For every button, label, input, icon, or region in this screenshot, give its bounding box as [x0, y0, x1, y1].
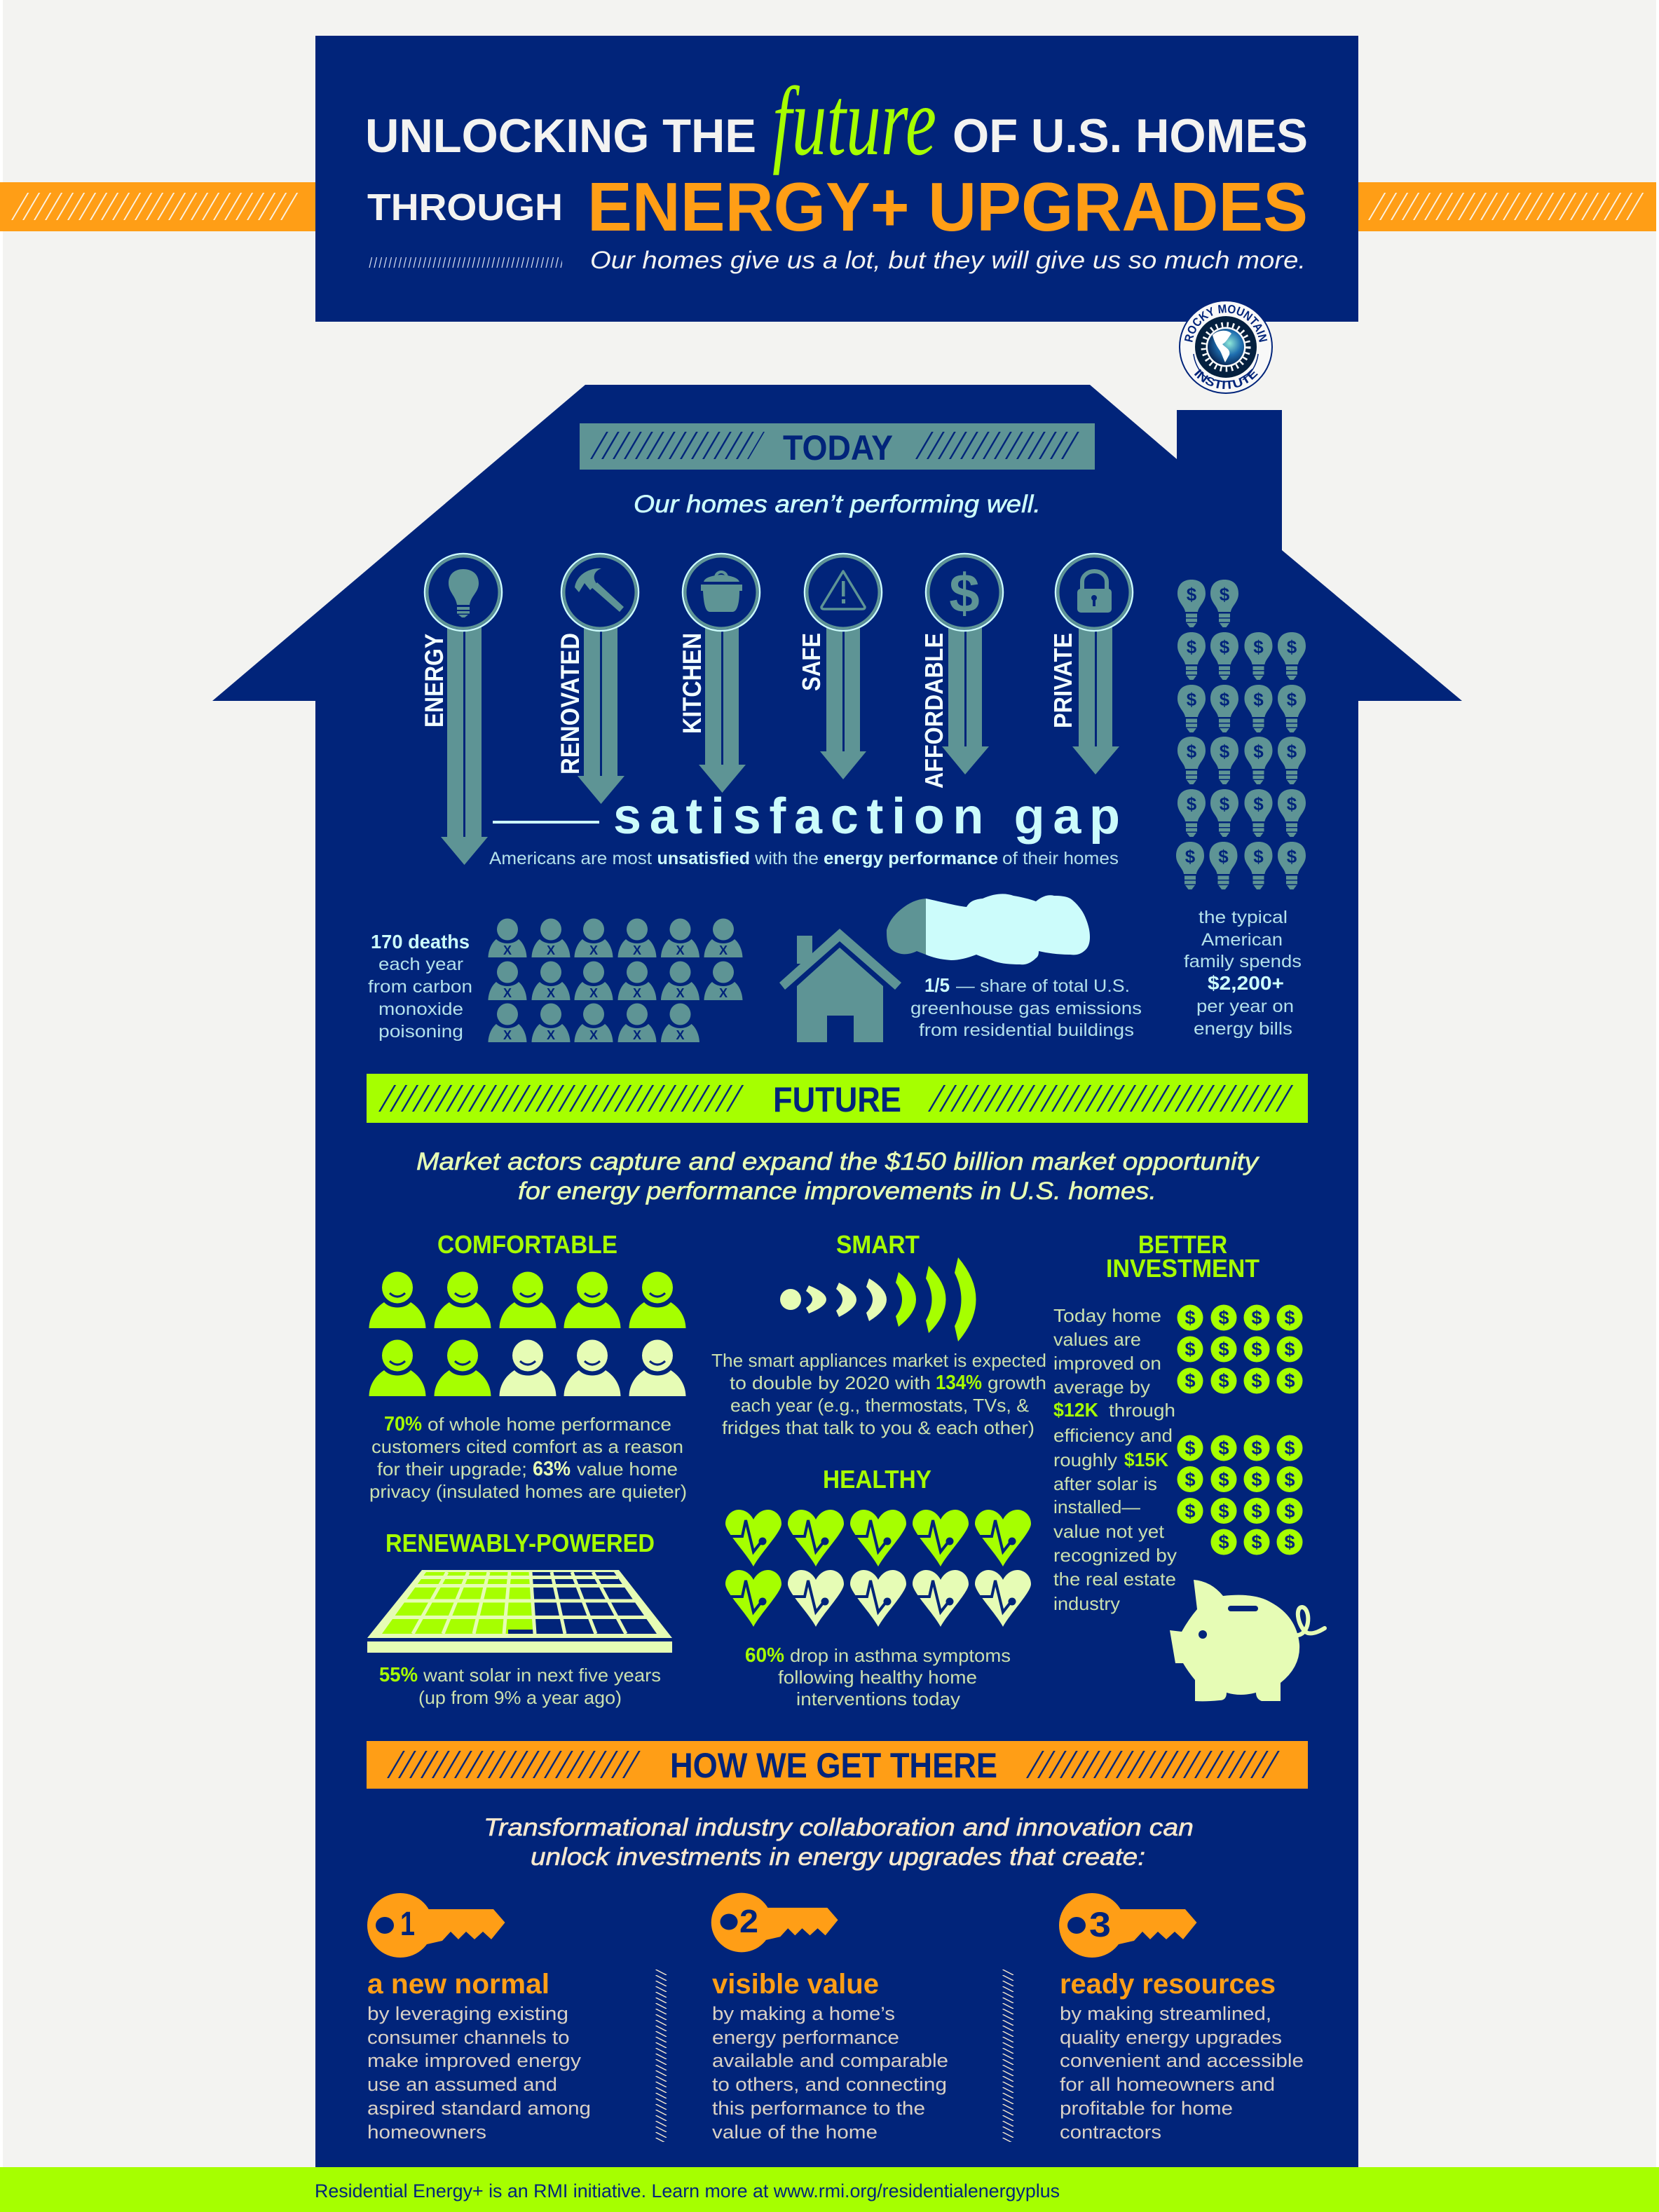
smart text: to double by 2020 with: [730, 1372, 931, 1393]
emissions text: greenhouse gas emissions: [910, 999, 1142, 1018]
section: renewably-powered: [367, 1529, 672, 1708]
text: a new normal: consumer channels to: [367, 2027, 569, 2048]
text: visible value: [712, 2003, 948, 2143]
healthy text: following healthy home: [778, 1667, 977, 1688]
better investment text: Today home: [1053, 1305, 1161, 1326]
text: a new normal: aspired standard among: [367, 2098, 591, 2119]
emissions text: [910, 974, 1142, 1040]
icon: pot: [683, 554, 760, 631]
header tagline: Our homes give us a lot, but they will give us so much more.: [590, 247, 1306, 274]
today banner: [580, 423, 1095, 470]
header tagline: [368, 247, 1306, 274]
satisfaction gap caption: [489, 849, 1119, 868]
family energy bills text: American: [1201, 930, 1283, 950]
text: ready resources: quality energy upgrades: [1060, 2027, 1282, 2048]
better investment text: roughly: [1053, 1449, 1117, 1470]
carbon monoxide deaths text: poisoning: [378, 1022, 463, 1042]
better investment text: improved on: [1053, 1353, 1161, 1374]
icon: house: [779, 929, 901, 1042]
text: a new normal: homeowners: [367, 2122, 486, 2143]
better investment heading: INVESTMENT: [1106, 1254, 1259, 1283]
text: ready resources: by making streamlined,: [1060, 2003, 1271, 2024]
family energy bills text: family spends: [1184, 952, 1302, 971]
icon: dollar: $: [949, 562, 980, 624]
text: a new normal: [367, 2003, 591, 2143]
text: ready resources: [1060, 2003, 1304, 2143]
icon: warning triangle: [805, 554, 882, 631]
arrow: energy: [420, 624, 488, 865]
panel: today: [368, 423, 1306, 1042]
family energy bills text: energy bills: [1194, 1019, 1292, 1039]
better investment text: efficiency and: [1053, 1425, 1173, 1446]
dollar coins chart: $$$$: [1184, 1370, 1295, 1391]
comfortable text: customers cited comfort as a reason: [371, 1436, 683, 1457]
comfortable text: [369, 1413, 687, 1502]
better investment text: industry: [1053, 1593, 1120, 1614]
carbon monoxide deaths text: each year: [378, 955, 463, 974]
better investment text: installed—: [1053, 1496, 1140, 1517]
column: a new normal: [367, 1893, 591, 2143]
comfortable text: privacy (insulated homes are quieter): [369, 1481, 687, 1502]
arrow: private: PRIVATE: [1049, 633, 1077, 728]
carbon monoxide deaths text: monoxide: [378, 999, 463, 1019]
dollar coins chart: $$$$: [1184, 1307, 1295, 1328]
future subheading: for energy performance improvements in U.S. homes.: [518, 1177, 1156, 1205]
title line two: THROUGH: [367, 186, 563, 228]
comfortable text: of whole home performance: [428, 1414, 671, 1435]
dollar bulbs chart: $$$$: [1187, 689, 1297, 710]
icon: key 1: 1: [400, 1906, 415, 1943]
comfortable text: for their upgrade;: [377, 1459, 527, 1480]
icon: dollar: [926, 554, 1003, 631]
better investment text: values are: [1053, 1329, 1141, 1350]
house silhouette: [212, 385, 1462, 2167]
arrow: kitchen: KITCHEN: [678, 633, 706, 734]
how we get there subheading: [484, 1814, 1194, 1871]
icon: key 2: 2: [739, 1903, 758, 1939]
panel: future: [367, 1074, 1325, 1709]
header panel: [315, 36, 1358, 322]
better investment text: $12K: [1053, 1399, 1098, 1421]
better investment text: the real estate: [1053, 1569, 1176, 1590]
better investment text: after solar is: [1053, 1473, 1157, 1494]
smart text: fridges that talk to you & each other): [722, 1417, 1035, 1438]
family energy bills text: the typical: [1199, 908, 1288, 927]
title line one: UNLOCKING THE: [365, 109, 756, 163]
column: ready resources: [1059, 1893, 1304, 2143]
smart text: [711, 1350, 1046, 1438]
satisfaction gap caption: Americans are most: [489, 849, 652, 868]
text: a new normal: use an assumed and: [367, 2074, 557, 2095]
emissions text: 1/5: [924, 974, 950, 996]
how we get there banner: HOW WE GET THERE: [670, 1746, 997, 1785]
how we get there subheading: Transformational industry collaboration and innovation can: [484, 1814, 1194, 1841]
text: visible value: available and comparable: [712, 2050, 948, 2071]
arrow: renovated: [556, 624, 624, 804]
renewably-powered text: [379, 1664, 661, 1708]
future subheading: Market actors capture and expand the $150 billion market opportunity: [416, 1148, 1260, 1175]
family energy bills text: $2,200+: [1208, 972, 1284, 994]
Rocky Mountain Institute logo: [1179, 301, 1273, 394]
better investment text: [1053, 1305, 1177, 1614]
how we get there banner: [367, 1741, 1308, 1789]
satisfaction gap heading: satisfaction gap: [613, 788, 1120, 845]
future subheading: [416, 1148, 1260, 1205]
renewably-powered heading: RENEWABLY-POWERED: [385, 1529, 655, 1557]
icon: solar panel: [367, 1570, 672, 1653]
dollar bulbs chart: $$$$: [1187, 793, 1297, 814]
better investment heading: [1106, 1230, 1259, 1283]
dollar coins chart: [1177, 1305, 1302, 1555]
icon: key 1: [367, 1893, 505, 1958]
dollar coins chart: $$$$: [1184, 1469, 1295, 1490]
section: comfortable: [369, 1230, 687, 1502]
heading: ready resources: ready resources: [1060, 1969, 1276, 2000]
better investment text: value not yet: [1053, 1521, 1165, 1542]
dollar coins chart: $$$$: [1184, 1438, 1295, 1459]
healthy text: interventions today: [796, 1688, 960, 1709]
dollar bulbs chart: $$: [1187, 584, 1230, 605]
title line one: OF U.S. HOMES: [953, 109, 1308, 163]
dollar bulbs chart: $$$$: [1185, 846, 1297, 867]
section: better investment: [1053, 1230, 1325, 1701]
dollar coins chart: $$$$: [1184, 1501, 1295, 1522]
footer bar: Residential Energy+ is an RMI initiative. Learn more at www.rmi.org/residentialenergyplus: [315, 2180, 1060, 2201]
text: ready resources: profitable for home: [1060, 2098, 1233, 2119]
icon: piggy bank: [1170, 1580, 1325, 1701]
arrow: safe: SAFE: [797, 633, 826, 691]
better investment text: through: [1109, 1400, 1175, 1421]
carbon monoxide deaths text: [368, 931, 472, 1042]
emissions text: — share of total U.S.: [956, 976, 1130, 996]
footer bar: [0, 2167, 1659, 2212]
smart text: 134%: [936, 1372, 982, 1394]
healthy text: drop in asthma symptoms: [790, 1645, 1011, 1666]
icon: hammer: [561, 554, 639, 631]
comfortable people pictogram: [369, 1271, 685, 1396]
smart text: each year (e.g., thermostats, TVs, &: [730, 1395, 1029, 1416]
renewably-powered text: 55%: [379, 1664, 418, 1686]
dollar coins chart: $$$: [1218, 1531, 1295, 1552]
renewably-powered text: want solar in next five years: [423, 1665, 661, 1686]
icon: key 3: [1059, 1893, 1197, 1958]
healthy text: [745, 1644, 1011, 1709]
today subheading: Our homes aren’t performing well.: [634, 491, 1041, 518]
dollar bulbs chart: $$$$: [1187, 636, 1297, 657]
text: visible value: this performance to the: [712, 2098, 925, 2119]
arrow: safe: [797, 624, 866, 779]
icon: signal waves: [780, 1257, 976, 1341]
Rocky Mountain Institute logo: ROCKY MOUNTAIN: [1184, 304, 1267, 342]
icon: light bulb: [425, 554, 502, 631]
renewably-powered text: (up from 9% a year ago): [418, 1687, 622, 1708]
icon: emissions cloud: [887, 894, 1090, 964]
comfortable heading: COMFORTABLE: [437, 1230, 617, 1259]
dollar coins chart: $$$$: [1184, 1339, 1295, 1360]
Rocky Mountain Institute logo: INSTITUTE: [1194, 369, 1258, 389]
dollar bulbs chart: $$$$: [1187, 741, 1297, 762]
dollar bulbs chart: [1176, 580, 1306, 889]
section: smart: [711, 1230, 1046, 1438]
better investment heading: BETTER: [1138, 1230, 1227, 1259]
comfortable text: 70%: [384, 1413, 422, 1435]
text: visible value: energy performance: [712, 2027, 899, 2048]
text: a new normal: by leveraging existing: [367, 2003, 568, 2024]
orange ribbon behind header: [0, 182, 1656, 231]
how we get there subheading: unlock investments in energy upgrades that create:: [531, 1843, 1145, 1871]
heading: a new normal: a new normal: [367, 1969, 549, 2000]
column: visible value: [711, 1893, 948, 2143]
arrow: affordable: AFFORDABLE: [920, 633, 948, 788]
text: a new normal: make improved energy: [367, 2050, 582, 2071]
carbon monoxide deaths text: 170 deaths: [371, 931, 470, 953]
arrow: affordable: [920, 624, 989, 788]
deaths pictogram: XXXXXX: [503, 943, 728, 957]
text: ready resources: for all homeowners and: [1060, 2074, 1275, 2095]
satisfaction gap caption: unsatisfied: [657, 849, 750, 868]
smart heading: SMART: [836, 1230, 920, 1259]
text: visible value: value of the home: [712, 2122, 878, 2143]
emissions text: from residential buildings: [919, 1020, 1134, 1040]
arrow: private: [1049, 624, 1119, 774]
deaths pictogram: XXXXXX: [503, 986, 728, 1000]
healthy text: 60%: [745, 1644, 784, 1667]
better investment text: $15K: [1124, 1449, 1168, 1470]
hearts pictogram: [725, 1510, 1031, 1627]
satisfaction gap caption: with the: [754, 849, 819, 868]
smart text: growth: [988, 1372, 1046, 1393]
better investment text: average by: [1053, 1377, 1150, 1398]
comfortable text: value home: [577, 1459, 678, 1480]
icon: key 3: 3: [1089, 1905, 1111, 1944]
arrow: renovated: RENOVATED: [556, 633, 585, 774]
deaths pictogram: [488, 918, 743, 1042]
text: visible value: by making a home’s: [712, 2003, 895, 2024]
comfortable text: 63%: [533, 1458, 571, 1480]
section: healthy: [725, 1465, 1031, 1709]
heading: visible value: visible value: [712, 1969, 879, 2000]
text: visible value: to others, and connecting: [712, 2074, 947, 2095]
future banner: [367, 1074, 1308, 1123]
arrow: kitchen: [678, 624, 746, 793]
icon: key 2: [711, 1893, 838, 1952]
healthy heading: HEALTHY: [823, 1465, 931, 1494]
title line one: [365, 67, 1308, 176]
family energy bills text: per year on: [1196, 997, 1294, 1016]
text: ready resources: contractors: [1060, 2122, 1161, 2143]
icon: padlock: [1056, 554, 1133, 631]
today banner: TODAY: [783, 428, 893, 467]
arrow: energy: ENERGY: [420, 634, 449, 728]
title line two: ENERGY+ UPGRADES: [587, 168, 1308, 245]
satisfaction gap caption: energy performance: [824, 849, 998, 868]
future banner: FUTURE: [773, 1080, 901, 1119]
deaths pictogram: XXXXX: [503, 1028, 685, 1042]
text: ready resources: convenient and accessible: [1060, 2050, 1304, 2071]
family energy bills text: [1184, 908, 1302, 1039]
better investment text: recognized by: [1053, 1545, 1177, 1566]
panel: how we get there: [367, 1741, 1308, 2143]
smart text: The smart appliances market is expected: [711, 1350, 1046, 1371]
satisfaction gap caption: of their homes: [1002, 849, 1119, 868]
title line one: future: [772, 67, 936, 176]
carbon monoxide deaths text: from carbon: [368, 977, 472, 997]
